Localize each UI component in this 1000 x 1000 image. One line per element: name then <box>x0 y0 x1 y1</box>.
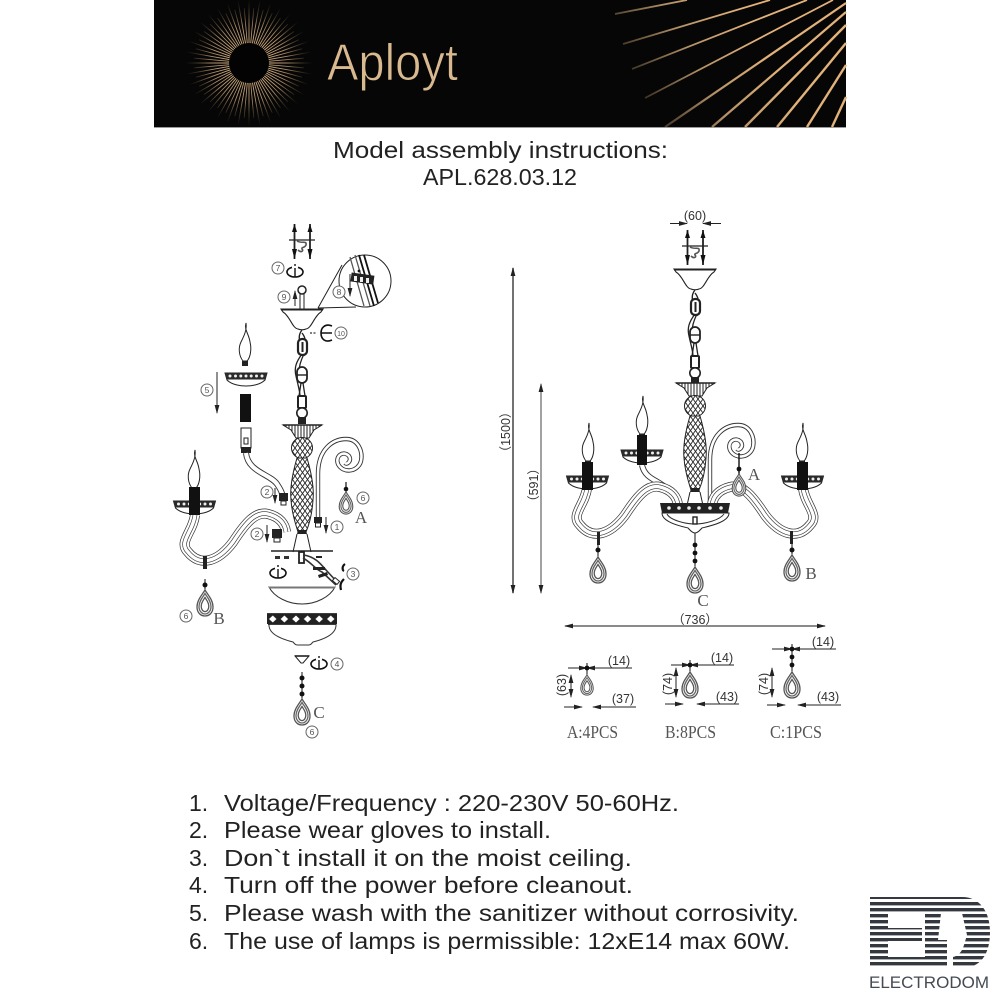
Electrodom logo: ELECTRODOM <box>869 974 989 992</box>
brand name: Aployt <box>327 34 458 92</box>
mounting plate with wiring, step 3: 3 <box>351 569 356 579</box>
top width dimension (60) <box>670 209 721 224</box>
right arm and candle <box>712 423 824 534</box>
safety instructions list <box>189 790 799 954</box>
step 5 upper candle parts <box>201 323 267 453</box>
pendant A: 6 <box>361 493 366 503</box>
ceiling bolts <box>682 230 708 265</box>
step 4 finial: 4 <box>335 659 340 669</box>
pendant B <box>180 556 225 628</box>
pendant C centre: C <box>697 591 709 610</box>
assembly diagram <box>174 224 391 738</box>
upper arm <box>246 453 288 505</box>
safety instructions list: 6. <box>189 928 208 954</box>
safety instructions list: The use of lamps is permissible: 12xE14 max 60W. <box>224 928 790 954</box>
upper arm: 2 <box>265 487 270 497</box>
stem <box>676 383 715 510</box>
central bowl <box>660 503 730 533</box>
step 10 ring <box>310 325 347 341</box>
width dimension 736: （736） <box>672 613 718 627</box>
magnified wire connector, step 8: 8 <box>337 287 342 297</box>
brand header banner <box>154 0 846 139</box>
dimension drawing of assembled chandelier <box>499 209 825 627</box>
decorative gold rays <box>615 0 846 127</box>
crystal detail A: (14) <box>608 654 630 668</box>
crystal detail B: (74) <box>661 673 675 695</box>
step 9 nipple <box>278 286 306 309</box>
safety instructions list: 2. <box>189 817 208 843</box>
title <box>333 137 668 190</box>
step 9 nipple: 9 <box>282 292 287 302</box>
safety instructions list: 4. <box>189 872 208 898</box>
canopy and chain <box>281 309 323 424</box>
pendant C: 6 <box>310 727 315 737</box>
crystal detail A: A:4PCS <box>567 722 618 742</box>
back candle and arm <box>621 396 677 505</box>
step 10 ring: 10 <box>337 331 345 338</box>
magnified wire connector, step 8 <box>318 255 391 308</box>
safety instructions list: Voltage/Frequency : 220-230V 50-60Hz. <box>224 790 679 816</box>
crystal detail C <box>757 635 841 742</box>
pendant B: 6 <box>184 611 189 621</box>
icon: sunburst logo <box>169 0 329 139</box>
left arm and candle <box>566 423 678 534</box>
safety instructions list: 3. <box>189 845 208 871</box>
scroll arm with socket: 1 <box>335 522 340 532</box>
safety instructions list: Please wash with the sanitizer without corrosivity. <box>224 900 799 926</box>
pendant A <box>339 482 369 527</box>
height dimension 1500: （1500） <box>499 406 513 458</box>
crystal detail A: (63) <box>555 674 569 696</box>
step 4 finial <box>295 656 343 670</box>
mounting plate with wiring, step 3 <box>270 551 359 590</box>
scroll arm <box>710 425 753 503</box>
pendant C <box>294 672 325 738</box>
crystal detail B: (43) <box>716 690 738 704</box>
canopy and chain <box>674 269 716 384</box>
title: APL.628.03.12 <box>423 164 577 190</box>
ceiling bolts and hook <box>289 224 315 259</box>
step 5 upper candle parts: 5 <box>205 385 210 395</box>
step 7: 7 <box>276 263 281 273</box>
pendant C: C <box>313 703 325 722</box>
crystal detail C: (14) <box>812 635 834 649</box>
pendant B right: B <box>805 564 817 583</box>
glass bowl with patterned band <box>267 614 337 645</box>
main stem <box>283 425 322 552</box>
crystal detail A: (37) <box>612 692 634 706</box>
pendant B: B <box>213 609 225 628</box>
pendant A: A <box>355 508 368 527</box>
top width dimension (60): (60) <box>684 209 706 223</box>
safety instructions list: Don`t install it on the moist ceiling. <box>224 845 632 871</box>
pendant C centre <box>687 533 709 610</box>
title: Model assembly instructions: <box>333 137 668 163</box>
crystal detail B: (14) <box>711 651 733 665</box>
step 7 <box>272 262 303 277</box>
pendant A on scroll <box>732 453 761 496</box>
left candle and arm <box>174 450 286 561</box>
left candle and arm: 2 <box>255 529 260 539</box>
crystal detail C: C:1PCS <box>770 722 822 742</box>
safety instructions list: Turn off the power before cleanout. <box>224 872 633 898</box>
crystal detail C: (43) <box>817 690 839 704</box>
pendant B left <box>590 532 606 583</box>
pendant B right <box>784 531 817 583</box>
safety instructions list: 1. <box>189 790 208 816</box>
height dimension 591: （591） <box>527 462 541 508</box>
pendant A on scroll: A <box>748 465 761 484</box>
crystal detail B: B:8PCS <box>665 722 716 742</box>
crystal detail C: (74) <box>757 673 771 695</box>
safety instructions list: Please wear gloves to install. <box>224 817 551 843</box>
crystal detail B <box>661 651 739 742</box>
Electrodom logo <box>868 897 992 992</box>
crystal detail A <box>555 654 636 742</box>
scroll arm with socket <box>314 439 361 533</box>
safety instructions list: 5. <box>189 900 208 926</box>
inner glass dish <box>269 587 335 604</box>
